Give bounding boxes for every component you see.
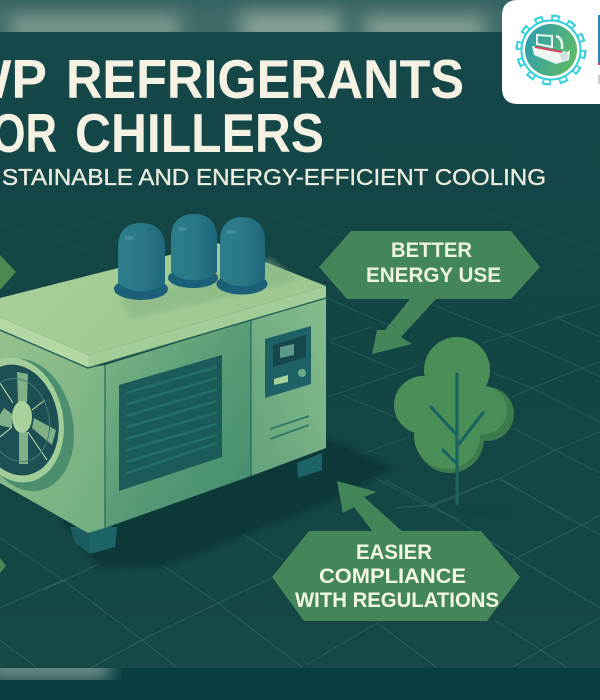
cylinder left: [114, 223, 168, 300]
left side face: [0, 330, 105, 533]
callout text: [295, 540, 499, 612]
logo card: [502, 0, 600, 104]
top lid: [0, 243, 326, 368]
callout text: [366, 239, 501, 287]
chiller unit: [0, 214, 326, 554]
left arrow fragments: [0, 255, 16, 573]
callout: easier compliance: [272, 481, 520, 621]
callout text: BETTER: [391, 239, 472, 262]
callout text: WITH REGULATIONS: [295, 588, 499, 612]
machine shadow: [60, 437, 392, 568]
front foot: [70, 527, 117, 554]
callout text: ENERGY USE: [366, 264, 501, 287]
logo wordmark edge: [598, 15, 600, 84]
title: REFRIGERANTS: [66, 48, 464, 110]
callout: better energy use: [319, 231, 540, 354]
arrow to unit: [337, 481, 403, 532]
control panel: [265, 326, 311, 398]
label lines: [270, 416, 309, 439]
tree: [394, 337, 514, 515]
vent grille: [119, 355, 222, 491]
fan: [0, 358, 74, 492]
bottom strip: [0, 668, 600, 700]
control side face: [251, 298, 326, 476]
trunk and branches: [431, 374, 483, 504]
arrow to unit: [372, 299, 436, 354]
subtitle: STAINABLE AND ENERGY-EFFICIENT COOLING: [2, 164, 546, 190]
back foot: [297, 453, 322, 478]
icon: gear logo: [519, 18, 583, 82]
title: [0, 48, 464, 164]
top blurred strip: [0, 0, 515, 32]
cylinder right: [216, 217, 268, 294]
title: CHILLERS: [75, 102, 324, 164]
cylinder middle: [168, 214, 218, 288]
floor grid: [0, 210, 600, 667]
front face: [105, 320, 251, 528]
callout text: COMPLIANCE: [319, 564, 466, 588]
callout text: EASIER: [356, 540, 432, 564]
